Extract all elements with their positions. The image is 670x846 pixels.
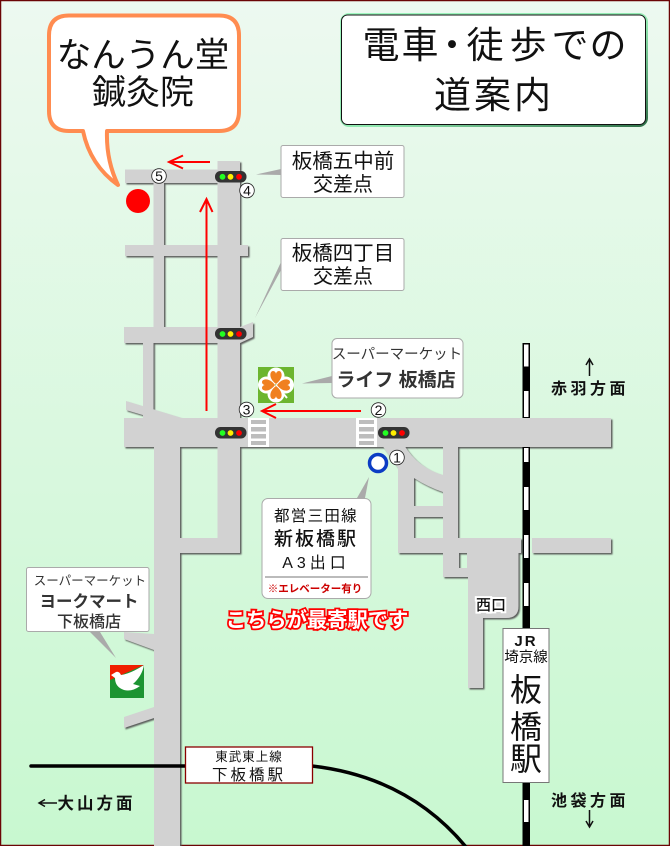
title box: 電車・徒歩での bbox=[362, 25, 626, 66]
label: JR Itabashi station bbox=[503, 628, 549, 782]
traffic light: west crossing bbox=[215, 427, 246, 438]
label: Itabashi Gochu-mae crossing: 板橋五中前 bbox=[292, 150, 394, 173]
step marker 2 bbox=[371, 402, 386, 418]
direction: Ikebukuro: 池袋方面 bbox=[551, 791, 629, 810]
label: west exit: 西口 bbox=[476, 597, 506, 614]
label: Shin-Itabashi station: 都営三田線 bbox=[274, 507, 358, 525]
crosswalk: east bbox=[356, 418, 377, 447]
icon: four-leaf clover bbox=[258, 367, 294, 403]
direction: Akabane bbox=[551, 359, 629, 398]
label: Tobu Shimo-Itabashi station: 下板橋駅 bbox=[212, 766, 286, 784]
destination marker bbox=[126, 189, 150, 213]
label: York Mart bbox=[26, 568, 149, 658]
step marker 1 bbox=[390, 450, 404, 466]
route arrow: west along the main road bbox=[262, 404, 361, 418]
road network bbox=[124, 161, 611, 846]
step marker 5: 5 bbox=[155, 168, 163, 184]
title box: 道案内 bbox=[434, 75, 554, 116]
step marker 1: 1 bbox=[393, 450, 401, 466]
traffic light: Itabashi Gochu-mae bbox=[215, 171, 246, 182]
step marker 5 bbox=[152, 168, 166, 184]
label: Itabashi Gochu-mae crossing: 交差点 bbox=[313, 173, 373, 196]
step marker 3 bbox=[239, 402, 254, 418]
label: Life supermarket: スーパーマーケット bbox=[332, 346, 462, 363]
label: JR Itabashi station: 埼京線 bbox=[504, 649, 548, 666]
route arrow: west at the top bbox=[169, 156, 210, 168]
step marker 2: 2 bbox=[375, 402, 383, 418]
label: Shin-Itabashi station: A3出口 bbox=[282, 554, 350, 572]
label: JR Itabashi station: JR bbox=[514, 633, 538, 650]
callout: clinic name bbox=[49, 16, 239, 185]
crosswalk: west bbox=[248, 418, 269, 447]
icon: York Mart dove bbox=[110, 665, 144, 698]
label: JR Itabashi station: 駅 bbox=[510, 741, 542, 777]
label: Tobu Shimo-Itabashi station bbox=[186, 747, 312, 784]
label: Tobu Shimo-Itabashi station: 東武東上線 bbox=[215, 749, 283, 764]
label: Itabashi 4-chome crossing bbox=[255, 238, 404, 318]
label: Itabashi Gochu-mae crossing bbox=[256, 146, 404, 198]
route arrow: north along the road bbox=[200, 199, 212, 411]
label: Shin-Itabashi station: 新板橋駅 bbox=[274, 528, 358, 550]
label: JR Itabashi station: 橋 bbox=[510, 709, 542, 745]
label: Life supermarket: ライフ 板橋店 bbox=[336, 369, 456, 391]
callout: clinic name: なんうん堂 bbox=[57, 37, 229, 75]
label: York Mart: スーパーマーケット bbox=[34, 574, 146, 588]
label: York Mart: ヨークマート bbox=[40, 592, 138, 611]
label: York Mart: 下板橋店 bbox=[57, 613, 121, 631]
nearest station note: こちらが最寄駅です bbox=[226, 608, 408, 632]
label: Itabashi 4-chome crossing: 板橋四丁目 bbox=[292, 242, 394, 265]
step marker 3: 3 bbox=[243, 402, 251, 418]
step marker 4: 4 bbox=[243, 182, 251, 198]
direction: Ikebukuro bbox=[551, 791, 629, 827]
direction: Akabane: 赤羽方面 bbox=[551, 379, 629, 398]
label: Life supermarket bbox=[302, 338, 463, 398]
step marker 4 bbox=[240, 182, 254, 198]
label: Shin-Itabashi station bbox=[262, 477, 371, 598]
traffic light: Itabashi 4-chome bbox=[215, 328, 246, 340]
railway: Tobu Tojo line bbox=[31, 766, 466, 846]
label: Itabashi 4-chome crossing: 交差点 bbox=[313, 265, 373, 288]
callout: clinic name: 鍼灸院 bbox=[92, 74, 194, 112]
station marker: Shin-Itabashi A3 exit bbox=[370, 454, 386, 472]
label: JR Itabashi station: 板 bbox=[510, 672, 542, 708]
label: Shin-Itabashi station: ※エレベーター有り bbox=[268, 582, 362, 595]
railway: JR Saikyo line bbox=[522, 343, 531, 846]
direction: Oyama: 大山方面 bbox=[58, 793, 136, 813]
traffic light: east crossing bbox=[378, 427, 410, 438]
title box bbox=[340, 13, 648, 127]
